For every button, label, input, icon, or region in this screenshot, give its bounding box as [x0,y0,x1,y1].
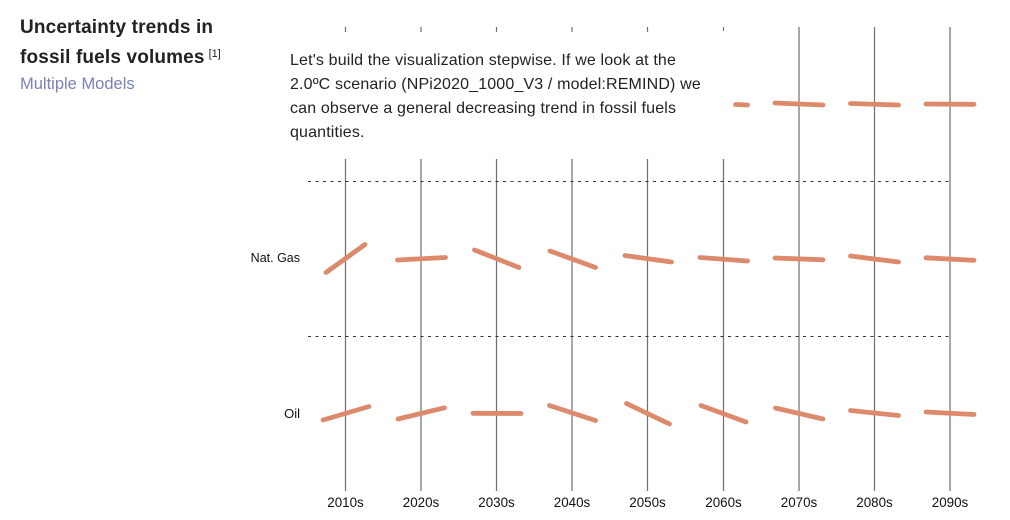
subtitle: Multiple Models [20,75,135,93]
text block: description [290,52,701,141]
text block: description: quantities. [290,124,365,141]
x axis labels [327,495,968,510]
row label: Nat. Gas: Nat. Gas [251,251,300,265]
x axis labels: 2030s [478,495,515,510]
x axis labels: 2050s [629,495,666,510]
x axis labels: 2090s [932,495,968,510]
x axis labels: 2060s [705,495,742,510]
x axis labels: 2070s [781,495,817,510]
text block: description: can observe a general decreasing trend in fossil fuels [290,100,676,117]
row label: Oil: Oil [284,406,300,421]
text block: description: 2.0ºC scenario (NPi2020_1000_V3 / model:REMIND) we [290,76,701,93]
x axis labels: 2010s [327,495,364,510]
x axis labels: 2080s [856,495,893,510]
row: natural gas slopes [326,244,974,272]
row: oil slopes [323,404,974,424]
row: coal slopes [736,103,974,105]
text block: description: Let's build the visualization stepwise. If we look at the [290,52,676,69]
title: Uncertainty trends in [20,17,213,38]
title [20,17,221,68]
x axis labels: 2020s [403,495,439,510]
x axis labels: 2040s [554,495,590,510]
title: fossil fuels volumes [1] [20,47,221,68]
